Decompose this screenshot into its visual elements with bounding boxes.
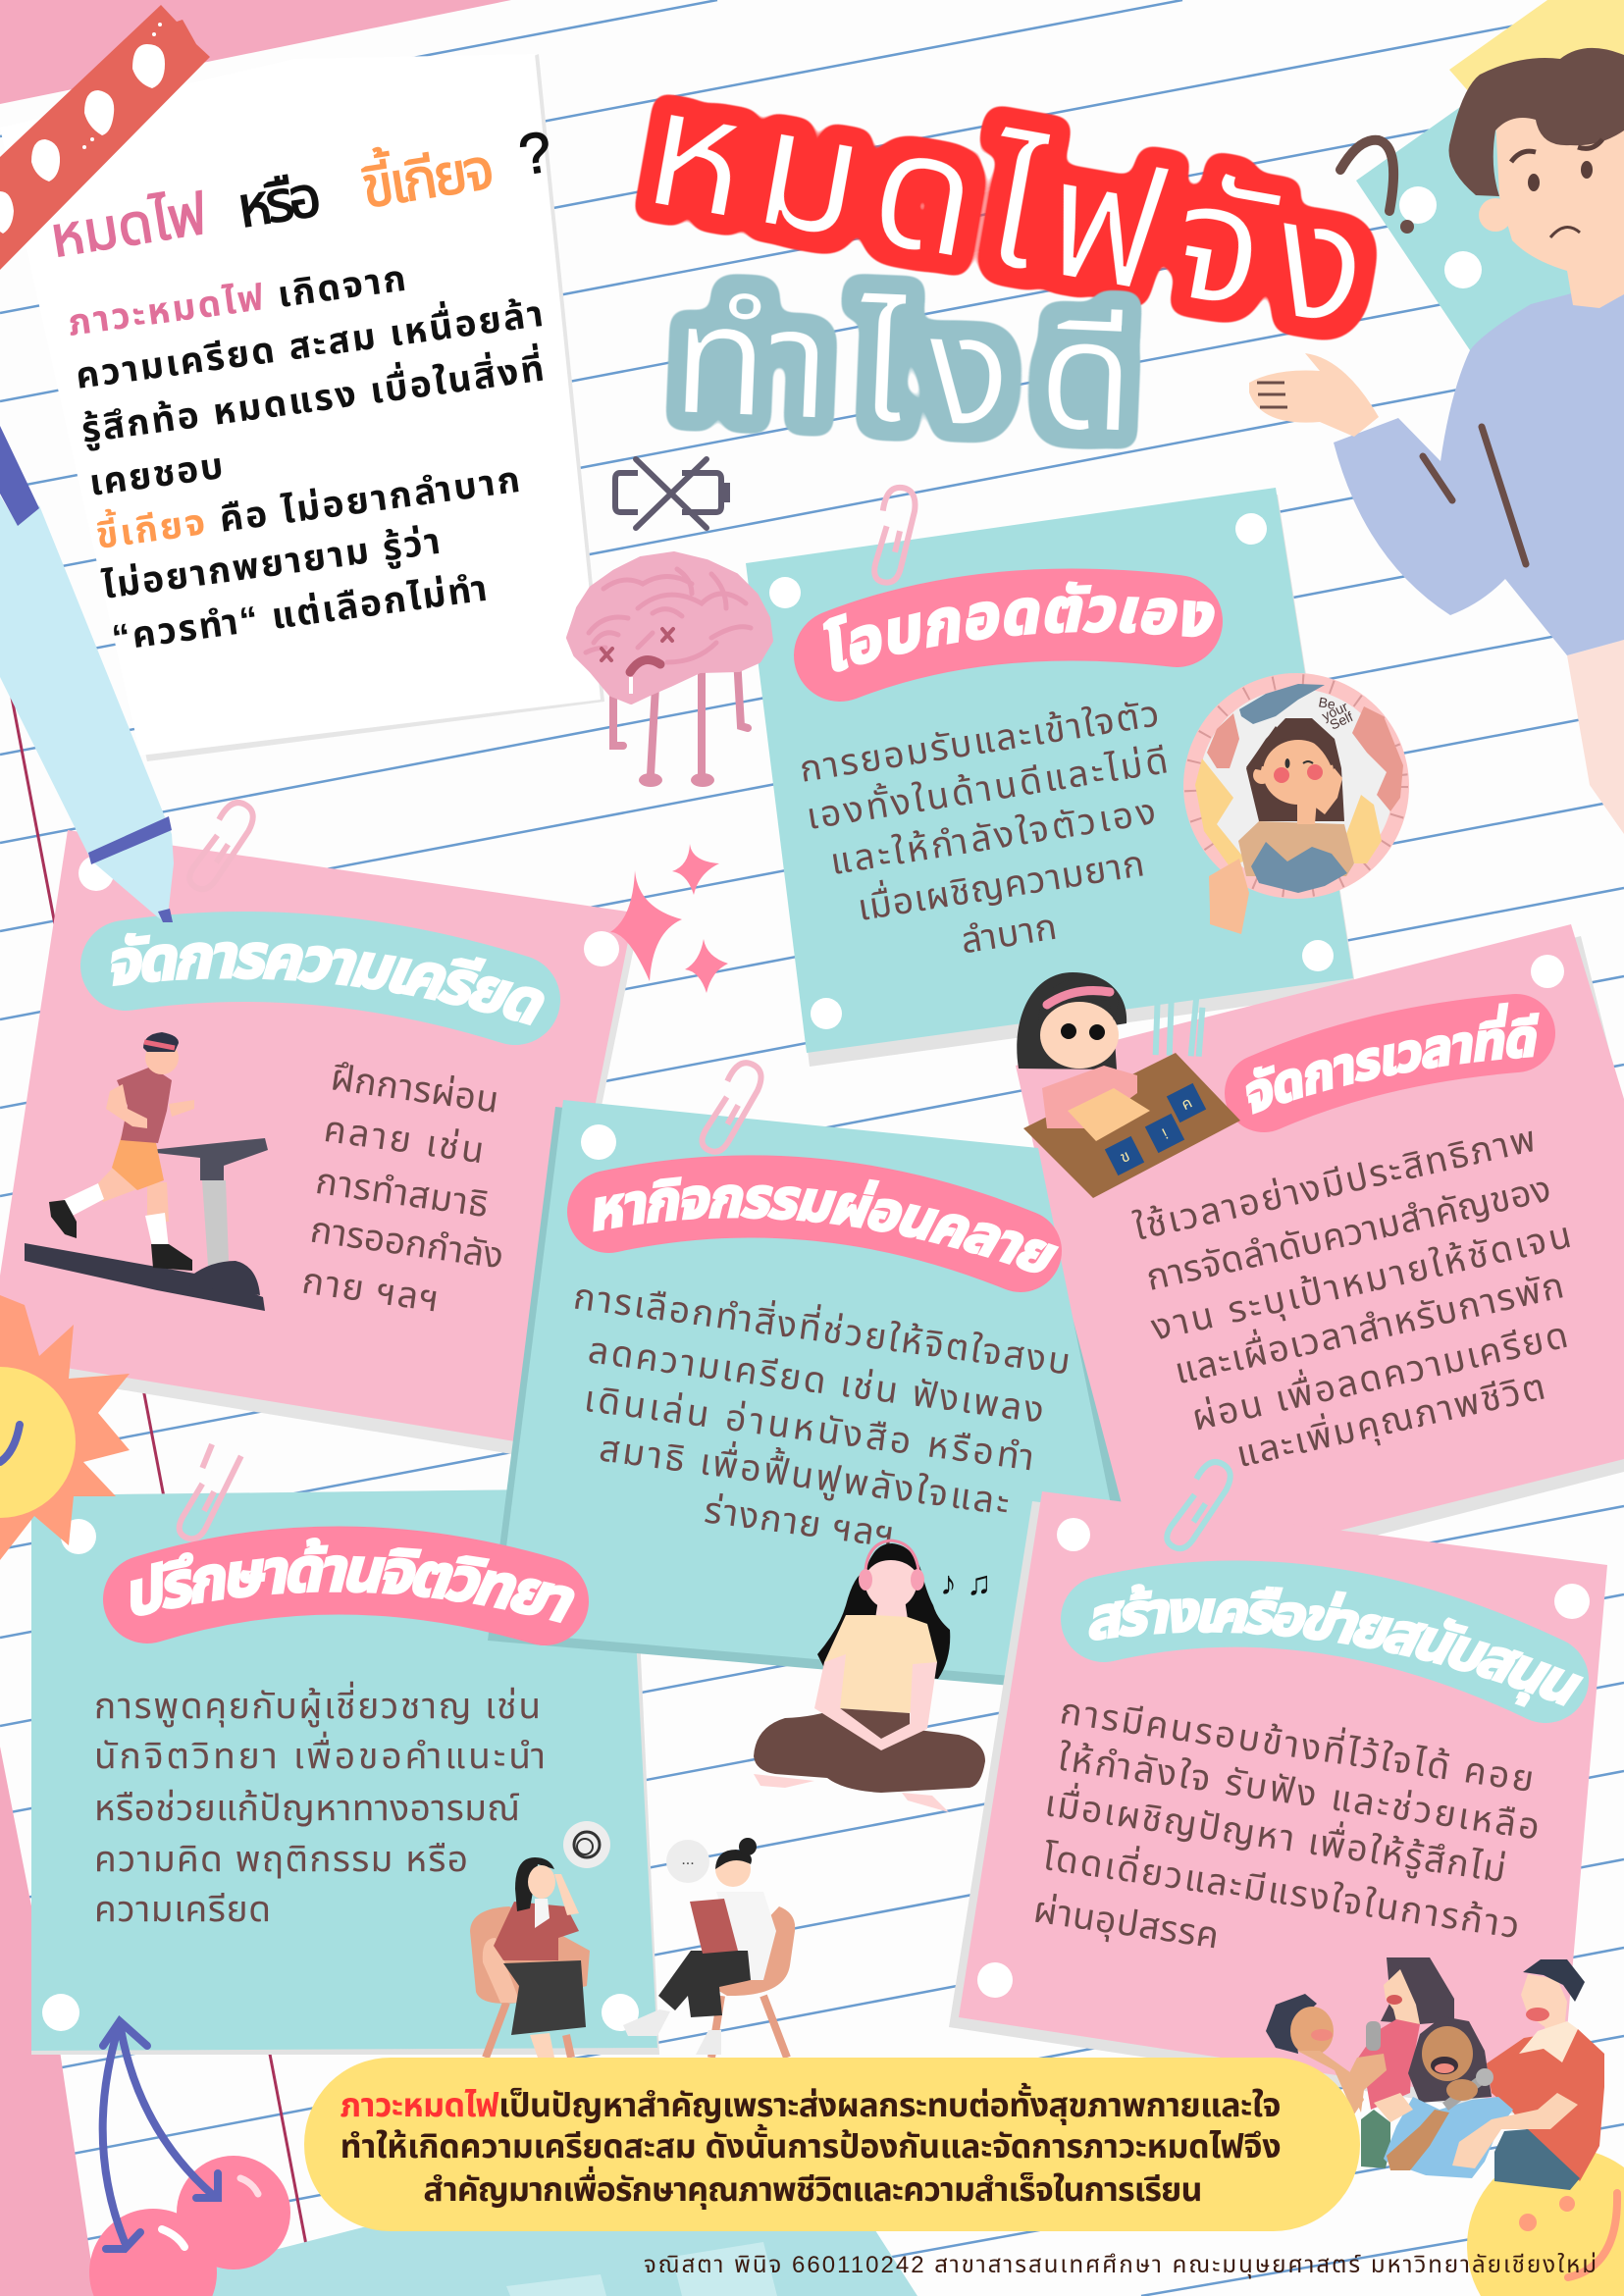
icon: girl at desk: !	[1160, 1126, 1172, 1143]
text: definitions: รู้สึกท้อ หมดแรง เบื่อในสิ่งที่	[79, 342, 547, 452]
icon: tired brain	[569, 554, 770, 787]
label text: หากิจกรรมผ่อนคลาย	[593, 1176, 1060, 1274]
text block	[1031, 1686, 1543, 1958]
panel: time management	[1016, 924, 1624, 1535]
text block	[300, 1057, 506, 1320]
text block	[797, 693, 1171, 962]
text block: สมาธิ เพื่อฟื้นฟูพลังใจและ	[597, 1423, 1013, 1525]
text block: ผ่านอุปสรรค	[1031, 1890, 1222, 1958]
panel: bottom teal sheet	[93, 2227, 917, 2296]
icon: girl at desk: ข	[1118, 1148, 1132, 1167]
text block: การออกกำลัง	[308, 1210, 506, 1277]
callout: summary box	[304, 2058, 1360, 2231]
text block: ให้กำลังใจ รับฟัง และช่วยเหลือ	[1056, 1738, 1543, 1848]
illustration: meditating woman	[754, 1540, 991, 1812]
text block: การพูดคุยกับผู้เชี่ยวชาญ เช่น	[94, 1681, 541, 1728]
panel: yellow corner note	[1449, 0, 1624, 118]
text block: และให้กำลังใจตัวเอง	[827, 791, 1159, 882]
icon: teal paper clip	[1163, 1456, 1236, 1556]
heading: burnout or laziness: ?	[515, 120, 556, 187]
text: definitions	[66, 258, 547, 658]
icon: be yourself circle: your	[1320, 699, 1350, 724]
text block: การทำสมาธิ	[313, 1161, 491, 1225]
label text: จัดการความเครียด	[111, 932, 545, 1026]
text block: และเพิ่มคุณภาพชีวิต	[1232, 1364, 1549, 1477]
icon: girl at desk	[1017, 972, 1240, 1198]
label text: จัดการเวลาที่ดี	[1246, 1003, 1540, 1115]
text block: เองทั้งในด้านดีและไม่ดี	[804, 737, 1171, 837]
label pill	[608, 1196, 1021, 1251]
panel: bottom pink strip	[0, 1747, 96, 2296]
callout: summary box: สำคัญมากเพื่อรักษาคุณภาพชีวิตและความสำเร็จในการเรียน	[423, 2166, 1202, 2210]
text block: คลาย เช่น	[322, 1109, 487, 1171]
label text: โอบกอดตัวเอง	[822, 581, 1215, 672]
icon: teal paper clip	[1156, 965, 1204, 1057]
icon: sun	[0, 1295, 130, 1560]
illustration: confused man	[1249, 48, 1624, 834]
callout: summary box: ภาวะหมดไฟเป็นปัญหาสำคัญเพราะส่งผลกระทบต่อทั้งสุขภาพกายและใจ	[340, 2082, 1282, 2125]
text: definitions: ไม่อยากพยายาม รู้ว่า	[100, 521, 443, 608]
text block: เดินเล่น อ่านหนังสือ หรือทำ	[582, 1379, 1036, 1478]
title: line 2: ทำไงดี	[670, 273, 1138, 465]
text block: เมื่อเผชิญปัญหา เพื่อให้รู้สึกไม่	[1042, 1778, 1509, 1892]
heading: burnout or laziness: ขี้เกียจ	[356, 130, 498, 221]
title: line 1: หมดไฟจัง	[634, 53, 1381, 363]
icon: paper clip	[872, 486, 917, 585]
label text: psychology: ปรึกษาด้านจิตวิทยา	[130, 1538, 575, 1623]
text block	[1130, 1119, 1575, 1477]
text: definitions: “ควรทำ“ แต่เลือกไม่ทำ	[110, 568, 490, 658]
icon: question mark	[1340, 140, 1414, 234]
text block: ร่างกาย ฯลฯ	[702, 1489, 897, 1555]
label text: สร้างเครือข่ายสนับสนุน	[1089, 1584, 1584, 1707]
illustration: friends singing	[1266, 1957, 1604, 2190]
heading: burnout or laziness: หรือ	[233, 164, 326, 240]
panel: support network	[949, 1458, 1607, 2113]
text block: ผ่อน เพื่อลดความเครียด	[1187, 1310, 1571, 1438]
icon: pen	[0, 426, 174, 922]
heading: burnout or laziness: หมดไฟ	[46, 183, 211, 270]
panel: teal corner note	[1356, 100, 1624, 350]
icon: girl at desk: ค	[1179, 1095, 1195, 1114]
label pill: psychology	[147, 1570, 545, 1601]
icon: be yourself circle	[1183, 673, 1409, 934]
icon: be yourself circle: Self	[1328, 708, 1355, 733]
panel: intro note	[0, 54, 604, 761]
icon: treadmill runner	[25, 1032, 268, 1311]
text block	[571, 1272, 1074, 1555]
text block: กาย ฯลฯ	[300, 1261, 442, 1320]
label pill	[126, 957, 515, 1000]
text: author credit: จณิสตา พินิจ 660110242 สาขาสารสนเทศศึกษา คณะมนุษยศาสตร์ มหาวิทยาลัยเชียงใหม่	[644, 2251, 1597, 2279]
icon: paper clip	[699, 1058, 766, 1159]
illustration: seated client and counsellor: ...	[681, 1852, 695, 1868]
text block: และเผื่อเวลาสำหรับการพัก	[1170, 1260, 1567, 1391]
icon: paper clip	[176, 1444, 241, 1545]
illustration: meditating woman: ♪	[940, 1565, 957, 1602]
icon: be yourself circle: Be	[1317, 694, 1336, 712]
heading: burnout or laziness	[45, 120, 557, 270]
text: definitions: ขี้เกียจ คือ ไม่อยากลำบาก	[93, 453, 522, 556]
icon: washi tape	[0, 5, 210, 270]
text: definitions: ความเครียด สะสม เหนื่อยล้า	[73, 287, 546, 396]
text block: โดดเดี่ยวและมีแรงใจในการก้าว	[1040, 1832, 1523, 1946]
label pill	[840, 614, 1177, 655]
panel: psychology consultation	[31, 1444, 659, 2055]
panel: relaxing activities	[488, 1060, 1121, 1686]
illustration: seated client and counsellor	[470, 1821, 795, 2058]
icon: empty battery	[615, 459, 727, 528]
text: definitions: ภาวะหมดไฟ เกิดจาก	[66, 258, 408, 343]
text block: เมื่อเผชิญความยาก	[854, 838, 1147, 928]
text block: ใช้เวลาอย่างมีประสิทธิภาพ	[1130, 1119, 1540, 1248]
panel: stress management	[0, 799, 634, 1454]
icon: yellow smiley	[1467, 2148, 1624, 2296]
icon: sparkles	[610, 844, 728, 993]
text block: ลดความเครียด เช่น ฟังเพลง	[586, 1330, 1046, 1431]
text block: ความคิด พฤติกรรม หรือ	[94, 1839, 468, 1879]
text block: ฝึกการผ่อน	[329, 1057, 501, 1121]
label pill	[1104, 1604, 1545, 1680]
text block: นักจิตวิทยา เพื่อขอคำแนะนำ	[94, 1731, 546, 1776]
text: definitions: เคยชอบ	[87, 445, 226, 503]
text block	[94, 1681, 546, 1929]
text block: ลำบาก	[958, 907, 1060, 962]
text block: การยอมรับและเข้าใจตัว	[797, 693, 1162, 790]
panel: pink corner band	[0, 0, 511, 104]
icon: paper clip	[185, 797, 259, 897]
text block: การจัดลำดับความสำคัญของ	[1142, 1169, 1554, 1298]
callout: summary box: ทำให้เกิดความเครียดสะสม ดังนั้นการป้องกันและจัดการภาวะหมดไฟจึง	[341, 2123, 1282, 2166]
text block: ความเครียด	[94, 1889, 271, 1929]
text block: หรือช่วยแก้ปัญหาทางอารมณ์	[94, 1788, 520, 1828]
icon: cherries	[89, 2021, 290, 2296]
label pill	[1264, 1033, 1516, 1093]
text block: การเลือกทำสิ่งที่ช่วยให้จิตใจสงบ	[571, 1272, 1074, 1383]
text block: การมีคนรอบข้างที่ไว้ใจได้ คอย	[1058, 1686, 1537, 1800]
panel: self compassion	[746, 485, 1409, 1067]
text block: งาน ระบุเป้าหมายให้ชัดเจน	[1148, 1215, 1575, 1350]
illustration: meditating woman: ♫	[967, 1565, 991, 1602]
